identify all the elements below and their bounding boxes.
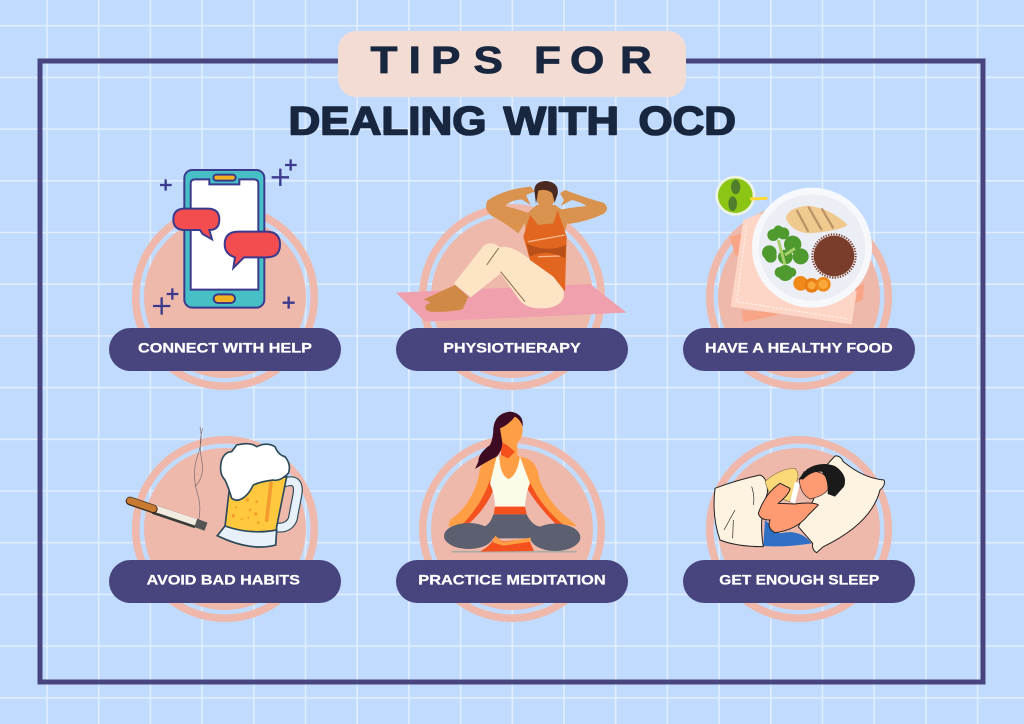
- icon: woman meditating: [444, 412, 580, 552]
- title: dealing with OCD: [288, 100, 736, 144]
- title badge: tips for: TIPS FOR: [371, 39, 652, 81]
- label pill: AVOID BAD HABITS: [147, 571, 300, 587]
- icon: cigarette and beer mug: [130, 427, 298, 547]
- panel: physiotherapy: [396, 181, 628, 386]
- title: dealing with OCD: OCD: [638, 100, 736, 144]
- outer frame: [40, 61, 983, 682]
- panel: avoid bad habits: [109, 427, 341, 618]
- label pill: [396, 328, 628, 371]
- icon: plate of food with drink: [715, 176, 872, 324]
- circle backdrop: [136, 208, 314, 386]
- icon: phone with chat bubbles: [153, 159, 297, 315]
- title badge: tips for: [338, 31, 686, 97]
- label pill: PRACTICE MEDITATION: [418, 571, 606, 587]
- label pill: HAVE A HEALTHY FOOD: [705, 340, 893, 356]
- circle backdrop: [710, 440, 888, 618]
- label pill: [396, 560, 628, 603]
- label pill: [683, 560, 915, 603]
- panel: get enough sleep: [683, 440, 915, 618]
- icon: person sleeping on pillow: [714, 456, 884, 553]
- circle backdrop: [423, 440, 601, 618]
- label pill: [683, 328, 915, 371]
- label pill: CONNECT WITH HELP: [138, 340, 312, 356]
- panel: have a healthy food: [683, 176, 915, 386]
- panel: connect with help: [109, 159, 341, 386]
- label pill: [109, 328, 341, 371]
- label pill: [109, 560, 341, 603]
- icon: person doing sit-ups on mat: [396, 181, 627, 322]
- title: dealing with OCD: WITH: [504, 100, 619, 144]
- circle backdrop: [136, 440, 314, 618]
- circle backdrop: [423, 208, 601, 386]
- label pill: PHYSIOTHERAPY: [443, 340, 581, 356]
- title: dealing with OCD: DEALING: [288, 100, 486, 144]
- panel: practice meditation: [396, 412, 628, 618]
- label pill: GET ENOUGH SLEEP: [719, 571, 879, 587]
- circle backdrop: [710, 208, 888, 386]
